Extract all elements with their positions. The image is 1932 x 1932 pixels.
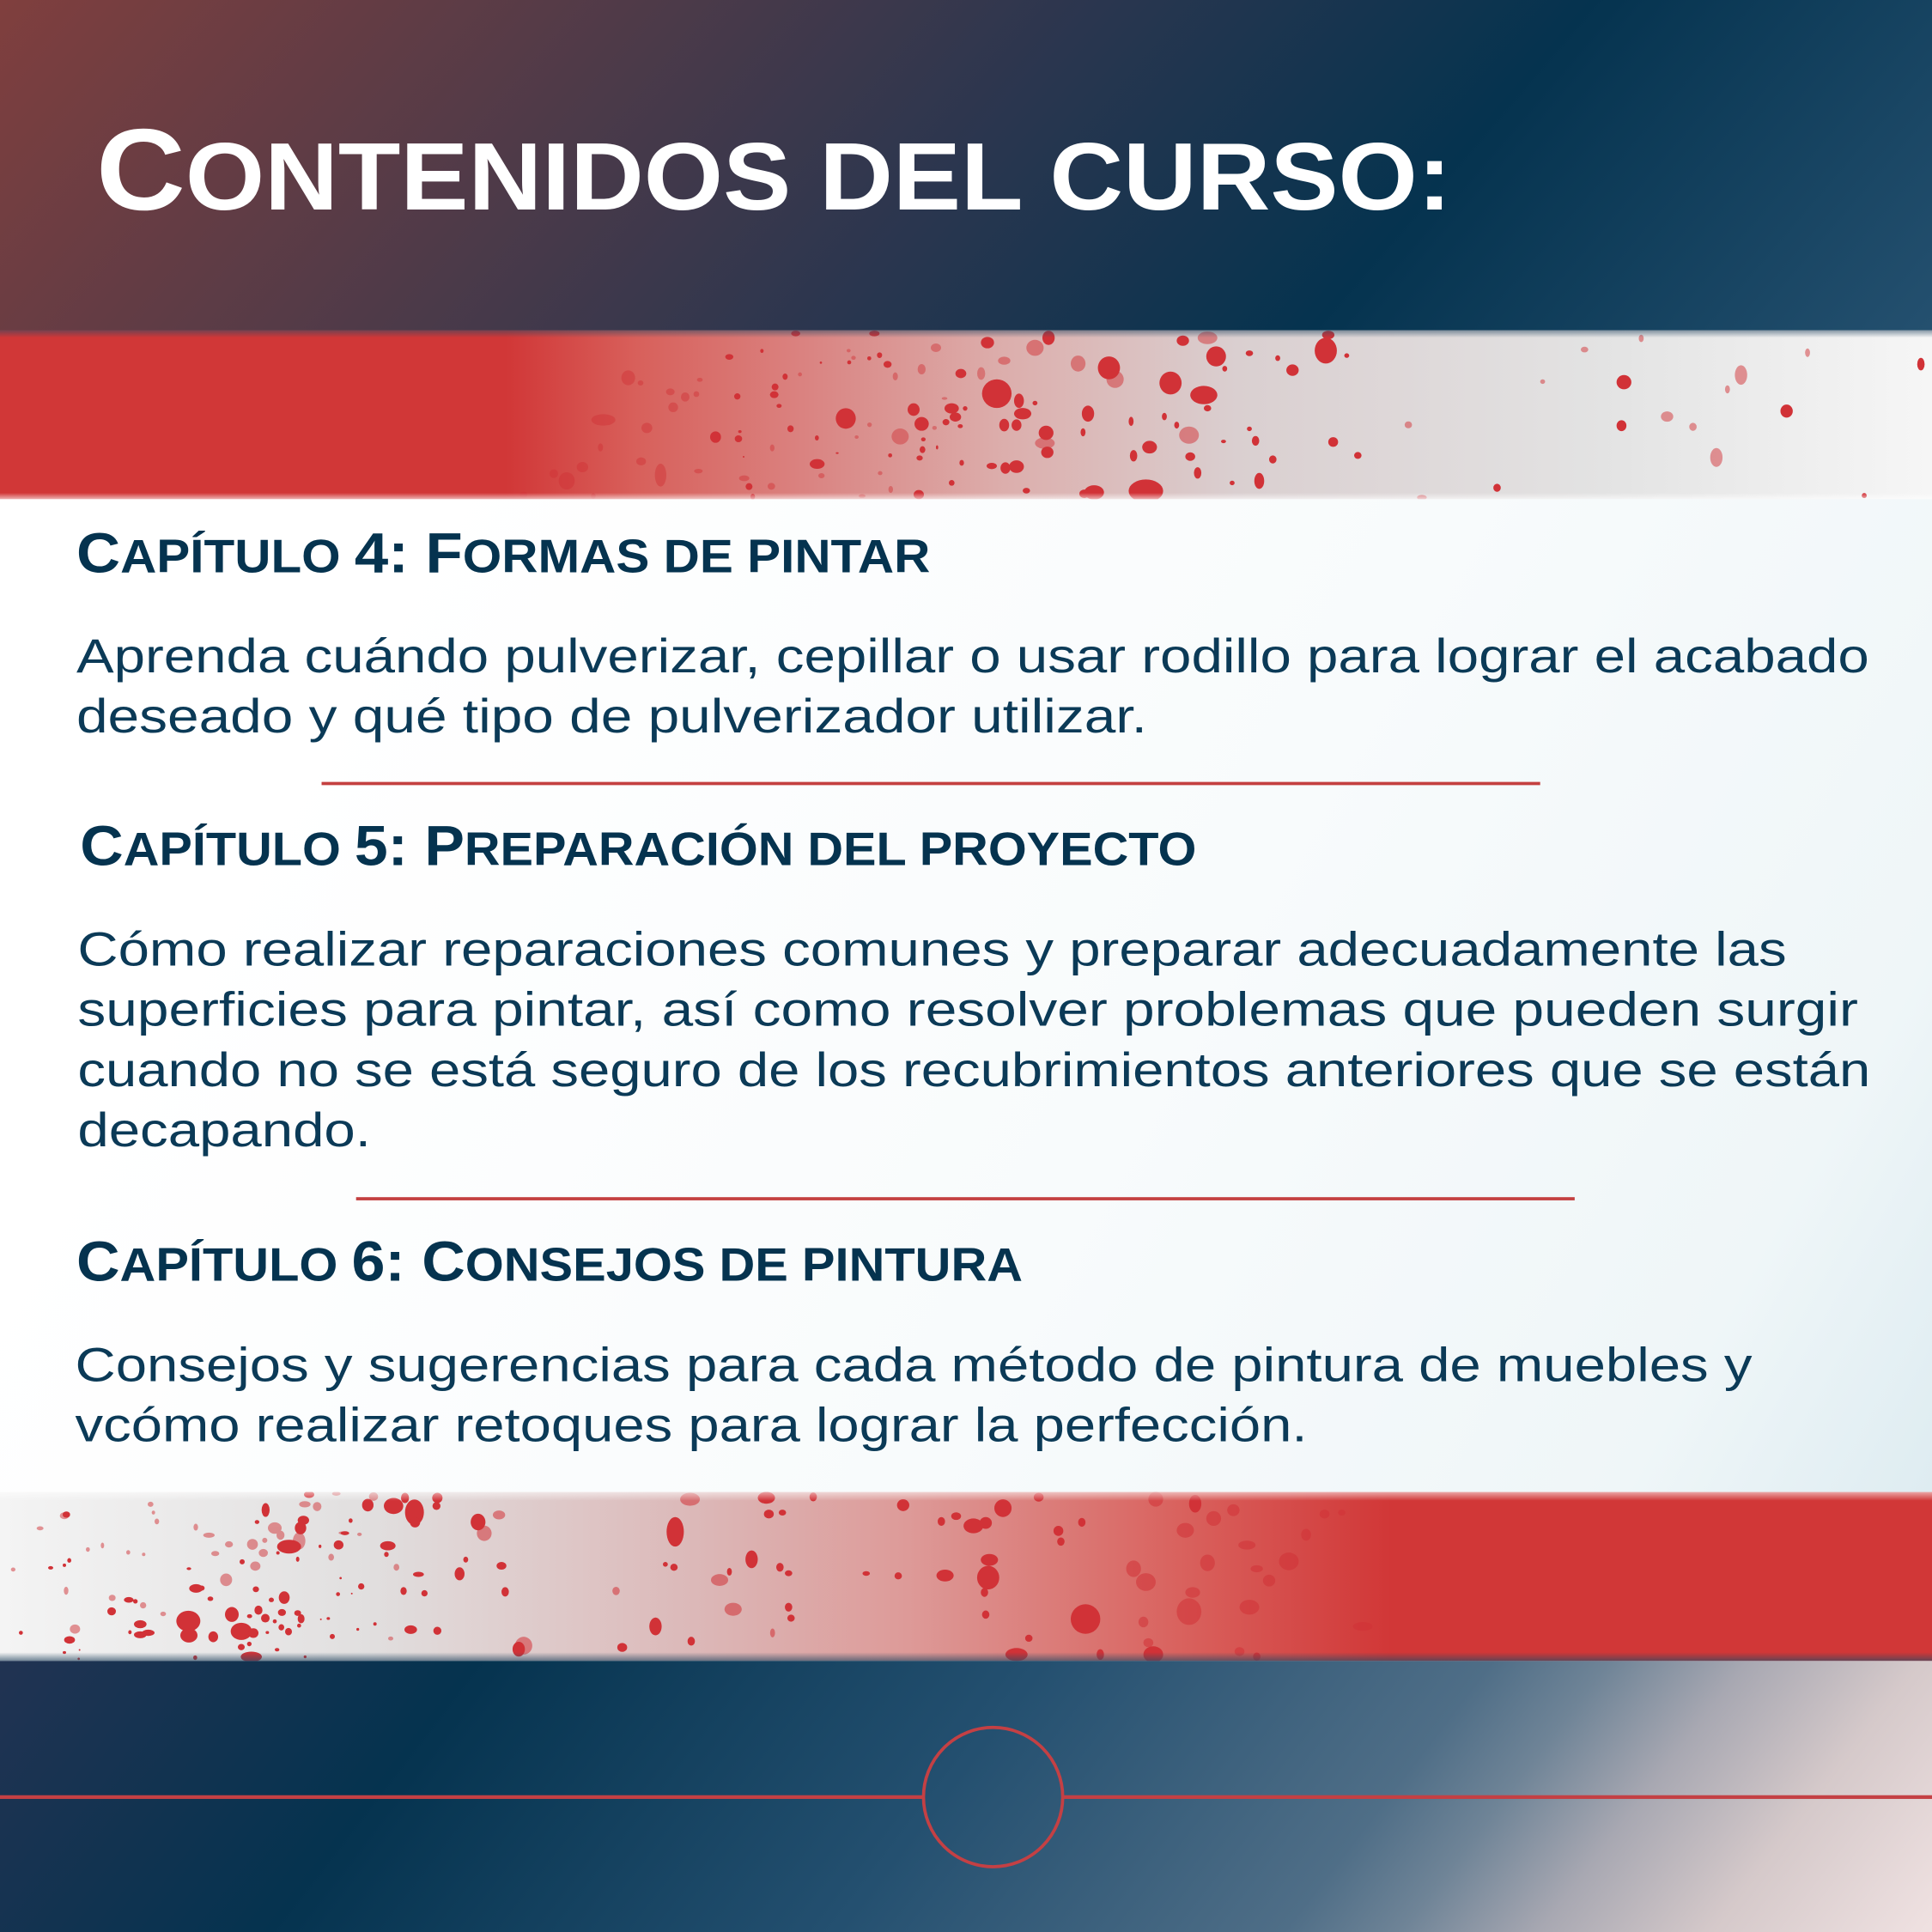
panel: chapter 5 — [77, 813, 1870, 1157]
heading: chapter 5: CAPÍTULO 5: PREPARACIÓN DEL PROYECTO — [80, 813, 1196, 877]
body text: chapter 4: Aprenda cuándo pulverizar, cepillar o usar rodillo para lograr el acabado — [76, 629, 1869, 683]
top paint splatter band — [0, 331, 1932, 502]
body text: chapter 6 — [76, 1338, 1753, 1452]
heading: chapter 4: CAPÍTULO 4: FORMAS DE PINTAR — [76, 521, 930, 585]
body text: chapter 5: Cómo realizar reparaciones comunes y preparar adecuadamente las — [77, 922, 1787, 975]
body text: chapter 4: deseado y qué tipo de pulverizador utilizar. — [76, 690, 1147, 743]
body text: chapter 5: superficies para pintar, así como resolver problemas que pueden surgir — [77, 983, 1858, 1036]
footer line: right — [1063, 1795, 1932, 1799]
panel: header banner — [0, 0, 1932, 331]
body text: chapter 5: decapando. — [77, 1103, 371, 1157]
panel: content background — [0, 499, 1932, 1492]
panel: chapter 4 — [76, 521, 1869, 743]
title: CONTENIDOS DEL CURSO: — [96, 105, 1451, 234]
body text: chapter 6: Consejos y sugerencias para cada método de pintura de muebles y — [76, 1338, 1753, 1391]
panel: footer banner — [0, 1661, 1932, 1932]
footer line: left — [0, 1795, 923, 1799]
body text: chapter 5 — [77, 922, 1870, 1157]
icon: circle — [923, 1728, 1063, 1867]
body text: chapter 6: vcómo realizar retoques para lograr la perfección. — [76, 1399, 1307, 1452]
heading: chapter 6: CAPÍTULO 6: CONSEJOS DE PINTURA — [76, 1230, 1023, 1293]
body text: chapter 4 — [76, 629, 1869, 743]
body text: chapter 5: cuando no se está seguro de los recubrimientos anteriores que se están — [77, 1043, 1870, 1097]
bottom paint splatter band — [0, 1492, 1932, 1662]
panel: chapter 6 — [76, 1230, 1753, 1452]
